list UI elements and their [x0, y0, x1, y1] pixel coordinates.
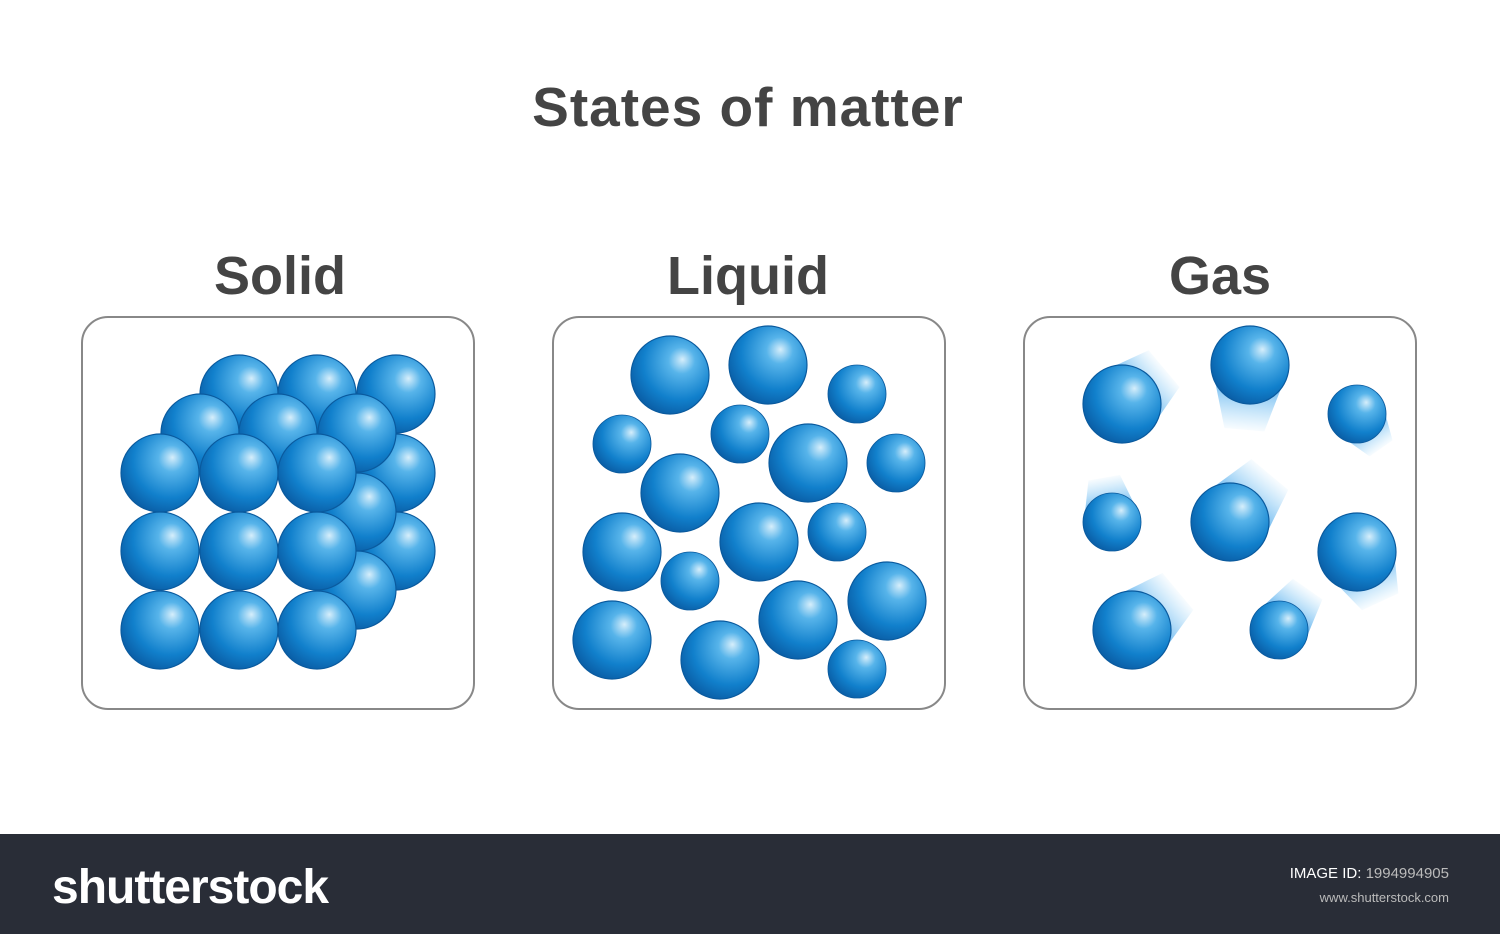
label: Gas: Gas	[1169, 246, 1271, 306]
footer url: www.shutterstock.com	[1319, 890, 1449, 905]
label: Solid: Solid	[214, 246, 346, 306]
footer image id: IMAGE ID: 1994994905	[1290, 865, 1449, 882]
title: States of matter	[532, 76, 964, 138]
label: Liquid: Liquid	[667, 246, 829, 306]
footer bar	[0, 834, 1500, 934]
panel: solid	[82, 317, 474, 709]
footer logo: shutterstock	[52, 861, 329, 914]
panel: gas	[1024, 317, 1416, 709]
panel: liquid	[553, 317, 945, 709]
